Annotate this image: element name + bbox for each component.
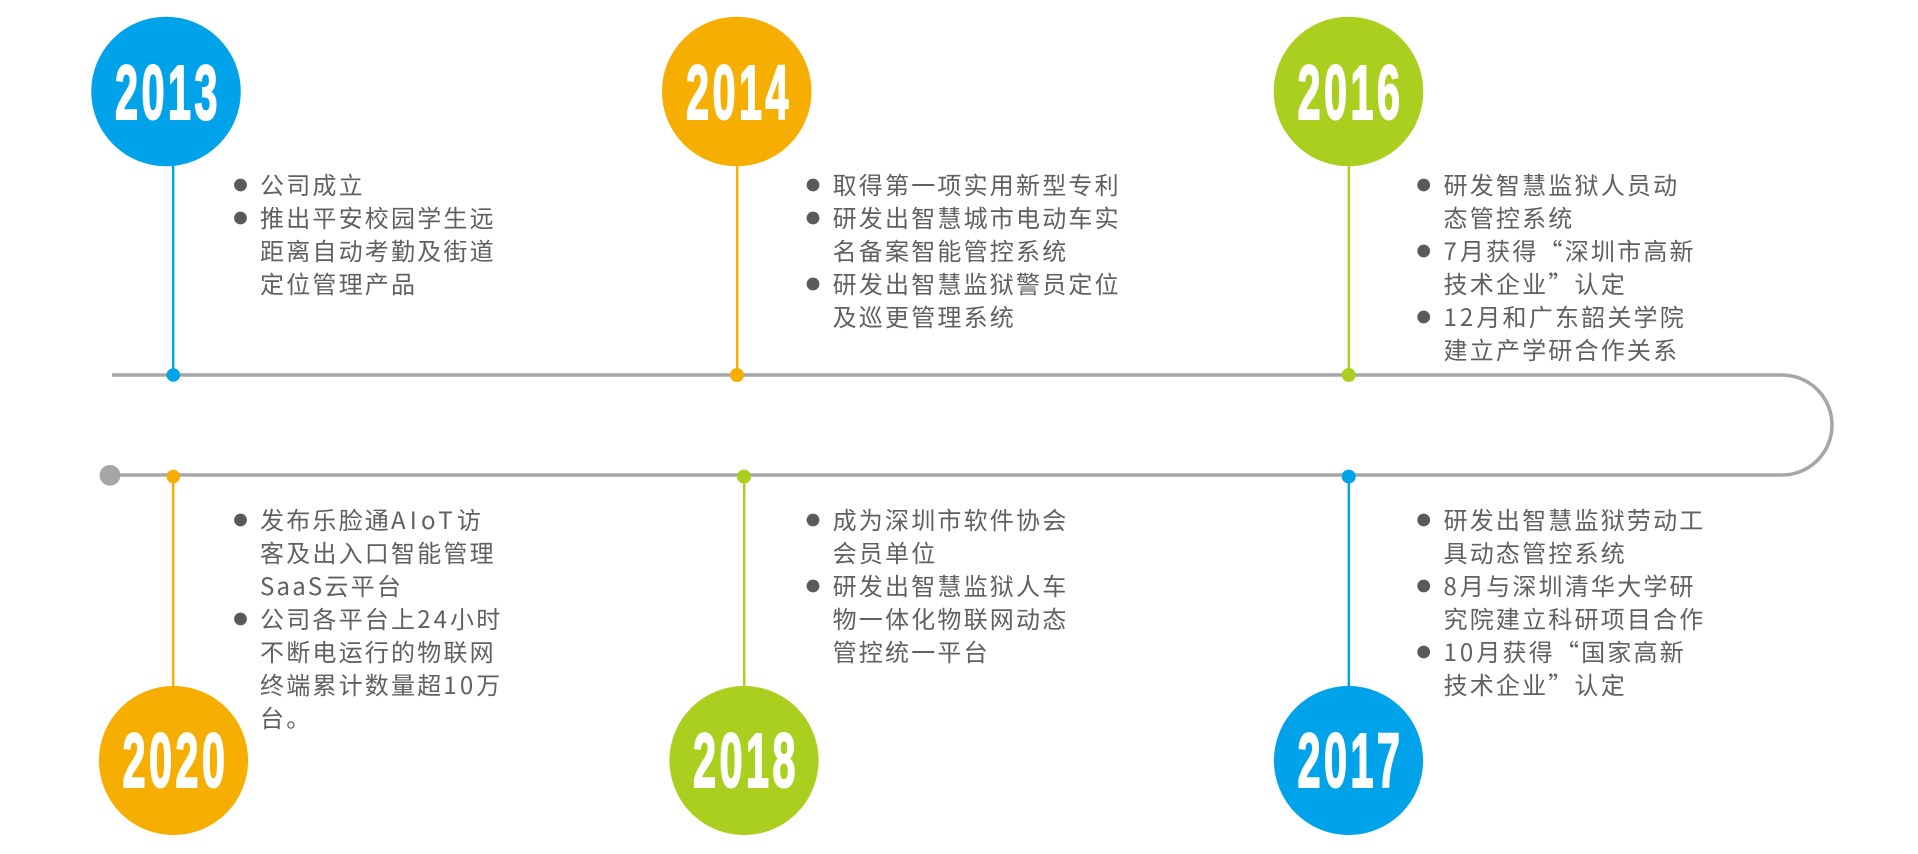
panel: 2020 [99, 470, 502, 835]
text 2020: SaaS云平台 [260, 567, 403, 602]
year badge 2020: 2020 [122, 719, 228, 804]
text 2017: 10月获得“国家高新 [1444, 633, 1686, 668]
text 2014: 研发出智慧城市电动车实 [833, 199, 1121, 234]
year badge 2016 [1274, 17, 1423, 166]
panel: 2013 [91, 17, 496, 382]
text 2014 [833, 166, 1121, 333]
year badge 2020 [99, 686, 248, 835]
text 2018 [833, 501, 1068, 668]
year badge 2017: 2017 [1298, 719, 1403, 804]
node 2020 [166, 470, 180, 483]
panel: 2018 [669, 470, 1068, 835]
connector 2018 [743, 477, 745, 691]
connector 2013 [172, 160, 174, 375]
node 2018 [737, 470, 751, 484]
text 2018: 会员单位 [833, 534, 937, 569]
text 2017: 究院建立科研项目合作 [1444, 600, 1706, 635]
text 2016: 12月和广东韶关学院 [1444, 298, 1686, 333]
text 2020: 不断电运行的物联网 [260, 633, 496, 668]
text 2020: 发布乐脸通AIoT访 [260, 501, 483, 536]
timeline end dot [100, 465, 120, 486]
text 2018: 研发出智慧监狱人车 [833, 567, 1068, 602]
year badge 2014: 2014 [686, 51, 792, 136]
connector 2017 [1348, 477, 1350, 691]
bullets 2018 [807, 514, 819, 592]
text 2016: 建立产学研合作关系 [1444, 331, 1679, 366]
text 2018: 管控统一平台 [833, 633, 990, 668]
bullets 2016 [1417, 179, 1430, 323]
text 2014: 名备案智能管控系统 [833, 232, 1068, 267]
text 2017: 具动态管控系统 [1444, 534, 1627, 569]
text 2017 [1444, 501, 1706, 701]
text 2013: 距离自动考勤及街道 [260, 232, 496, 267]
year badge 2013: 2013 [115, 51, 221, 136]
text 2014: 研发出智慧监狱警员定位 [833, 265, 1121, 300]
text 2014: 取得第一项实用新型专利 [833, 166, 1121, 201]
text 2013: 公司成立 [260, 166, 365, 201]
connector 2020 [172, 477, 174, 691]
text 2016: 态管控系统 [1444, 199, 1574, 234]
text 2016: 7月获得“深圳市高新 [1444, 232, 1696, 267]
node 2017 [1342, 470, 1356, 484]
node 2014 [730, 368, 744, 382]
connector 2016 [1348, 160, 1350, 375]
text 2016: 研发智慧监狱人员动 [1444, 166, 1679, 201]
text 2016: 技术企业”认定 [1444, 265, 1627, 300]
panel: 2014 [662, 17, 1121, 382]
text 2020: 终端累计数量超10万 [260, 666, 502, 701]
bullets 2020 [234, 514, 247, 625]
year badge 2018: 2018 [693, 719, 799, 804]
text 2014: 及巡更管理系统 [833, 298, 1016, 333]
text 2020: 台。 [260, 699, 312, 734]
year badge 2018 [669, 686, 819, 835]
text 2017: 技术企业”认定 [1444, 666, 1627, 701]
connector 2014 [736, 160, 738, 375]
text 2013: 定位管理产品 [260, 265, 417, 300]
text 2017: 8月与深圳清华大学研 [1444, 567, 1696, 602]
year badge 2017 [1274, 686, 1423, 835]
text 2018: 物一体化物联网动态 [833, 600, 1068, 635]
timeline track [110, 375, 1832, 475]
bullets 2013 [234, 179, 247, 224]
text 2020 [260, 501, 502, 734]
text 2013: 推出平安校园学生远 [260, 199, 496, 234]
year badge 2016: 2016 [1298, 51, 1403, 136]
node 2016 [1342, 368, 1356, 382]
text 2018: 成为深圳市软件协会 [833, 501, 1068, 536]
text 2016 [1444, 166, 1696, 366]
bullets 2014 [807, 179, 819, 290]
text 2013 [260, 166, 496, 300]
node 2013 [166, 368, 180, 382]
text 2017: 研发出智慧监狱劳动工 [1444, 501, 1706, 536]
text 2020: 客及出入口智能管理 [260, 534, 496, 569]
panel: 2017 [1274, 470, 1706, 835]
year badge 2013 [91, 17, 241, 166]
bullets 2017 [1417, 514, 1430, 658]
year badge 2014 [662, 17, 812, 166]
panel: 2016 [1274, 17, 1696, 382]
text 2020: 公司各平台上24小时 [260, 600, 502, 635]
